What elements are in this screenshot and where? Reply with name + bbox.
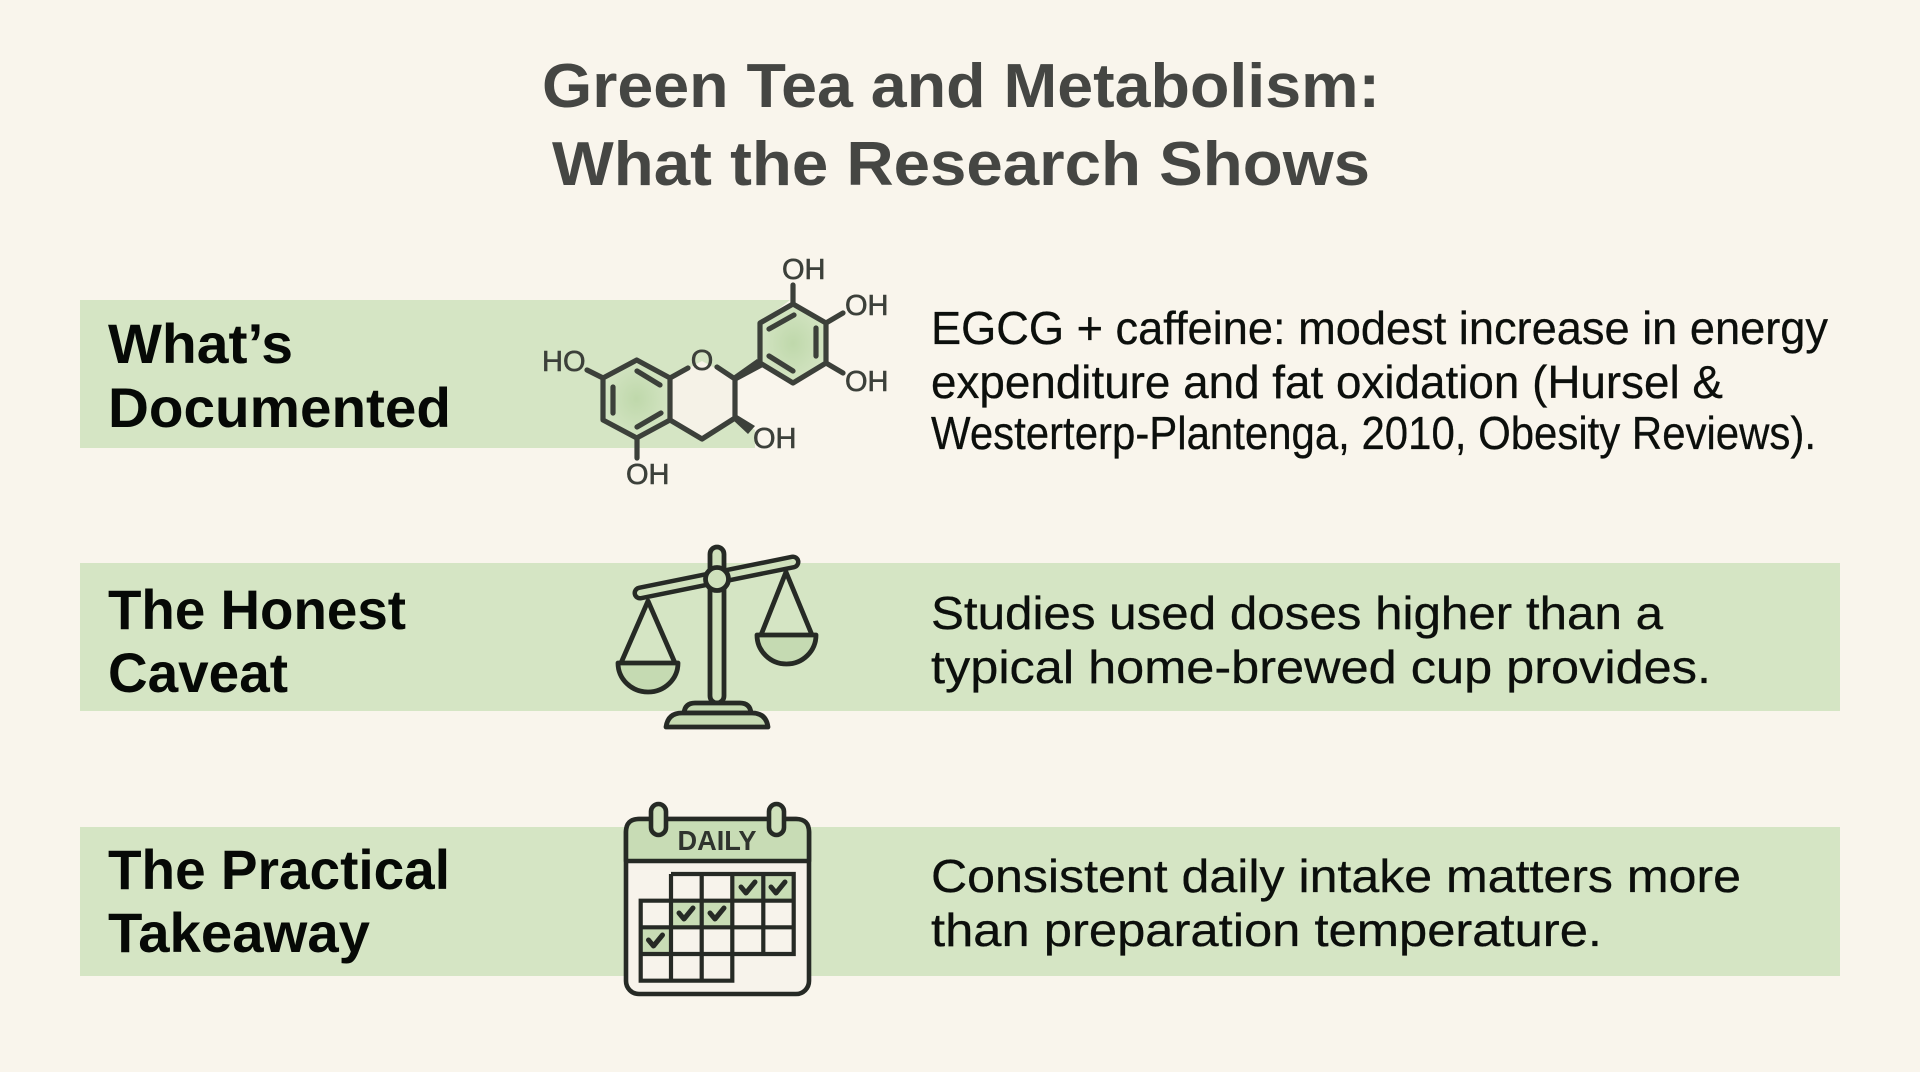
title: Green Tea and Metabolism: — [542, 52, 1380, 121]
band: what's documented — [80, 300, 790, 448]
panel: the practical takeaway — [80, 804, 1840, 994]
heading: what's documented — [108, 312, 451, 439]
icon: EGCG molecule: OH — [845, 290, 888, 322]
band: the honest caveat — [80, 563, 1840, 711]
heading: the practical takeaway — [108, 838, 450, 964]
heading: the honest caveat: The Honest — [108, 578, 406, 641]
icon: EGCG molecule: HO — [542, 346, 586, 378]
icon: daily calendar — [626, 804, 809, 994]
title: What the Research Shows — [552, 130, 1370, 199]
heading: the practical takeaway: The Practical — [108, 838, 450, 901]
icon: EGCG molecule — [542, 254, 888, 491]
description: the practical takeaway: Consistent daily intake matters more — [931, 850, 1741, 902]
heading: the honest caveat: Caveat — [108, 641, 288, 704]
panel: the honest caveat — [80, 547, 1840, 727]
description: what's documented: expenditure and fat oxidation (Hursel & — [931, 356, 1723, 408]
heading: the honest caveat — [108, 578, 406, 704]
description: the honest caveat — [931, 587, 1711, 693]
icon: EGCG molecule: OH — [782, 254, 826, 286]
icon: daily calendar: DAILY — [678, 825, 757, 856]
icon: EGCG molecule: O — [691, 345, 713, 377]
description: the honest caveat: Studies used doses higher than a — [931, 587, 1663, 639]
description: what's documented: EGCG + caffeine: modest increase in energy — [931, 302, 1828, 354]
description: what's documented: Westerterp-Plantenga, 2010, Obesity Reviews). — [931, 407, 1816, 459]
description: the honest caveat: typical home-brewed cup provides. — [931, 641, 1711, 693]
icon: EGCG molecule: OH — [626, 459, 670, 491]
heading: the practical takeaway: Takeaway — [108, 901, 370, 964]
panel: what's documented — [80, 254, 1828, 491]
title — [542, 52, 1380, 199]
icon: balance scale — [618, 547, 816, 727]
icon: EGCG molecule: OH — [845, 366, 888, 398]
description: the practical takeaway — [931, 850, 1741, 956]
description: the practical takeaway: than preparation temperature. — [931, 904, 1602, 956]
description: what's documented — [931, 302, 1828, 459]
heading: what's documented: Documented — [108, 376, 451, 439]
band: the practical takeaway — [80, 827, 1840, 976]
heading: what's documented: What’s — [108, 312, 293, 375]
icon: EGCG molecule: OH — [753, 423, 796, 455]
